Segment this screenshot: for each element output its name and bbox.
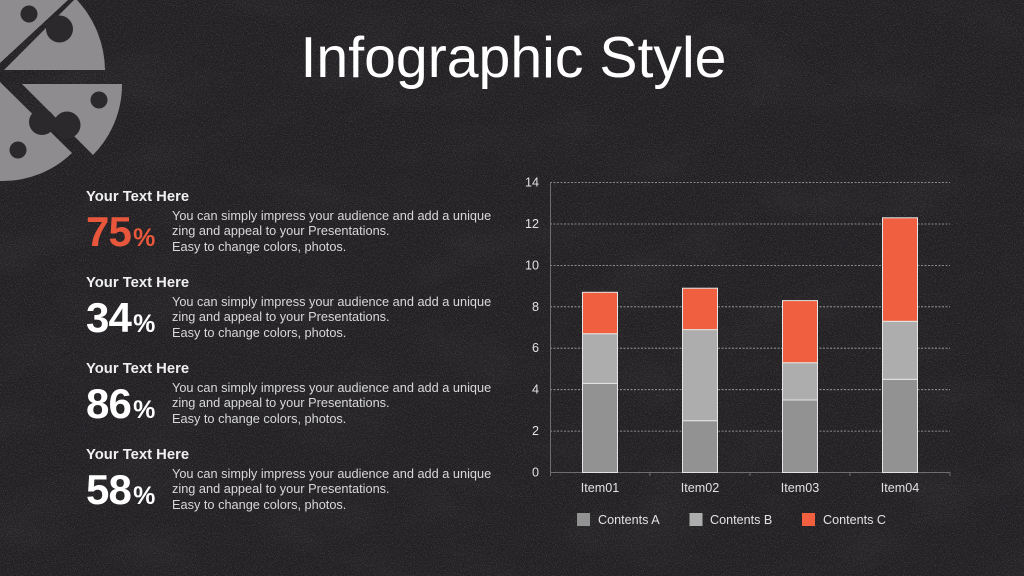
- y-axis labels: 2: [532, 424, 539, 438]
- text block: 86%: Easy to change colors, photos.: [172, 411, 346, 426]
- text block: 34%: zing and appeal to your Presentations.: [172, 309, 390, 324]
- text block: 86%: zing and appeal to your Presentations.: [172, 395, 390, 410]
- text block: 75%: Your Text Here: [86, 188, 189, 204]
- y-axis labels: 4: [532, 383, 539, 397]
- legend: [577, 513, 886, 527]
- text block: 86%: [86, 360, 491, 427]
- bar: Item01: [582, 292, 618, 472]
- x-axis labels: [581, 481, 919, 495]
- x-axis labels: Item04: [881, 481, 919, 495]
- text block: 34%: Your Text Here: [86, 274, 189, 290]
- text block: 75%: [86, 188, 491, 255]
- text block: 58%: zing and appeal to your Presentations.: [172, 481, 390, 496]
- text block: 75%: You can simply impress your audience and add a unique: [172, 208, 491, 223]
- y-axis labels: 8: [532, 300, 539, 314]
- text block: 34%: You can simply impress your audience and add a unique: [172, 294, 491, 309]
- bar: Item04: [882, 218, 918, 472]
- y-axis labels: 10: [525, 258, 539, 272]
- text block: 86%: Your Text Here: [86, 360, 189, 376]
- text block: 34%: 34%: [86, 294, 155, 341]
- x-axis labels: Item03: [781, 481, 819, 495]
- title: Infographic Style: [300, 26, 726, 90]
- bar: Item03: [782, 301, 818, 472]
- text block: 86%: You can simply impress your audience and add a unique: [172, 380, 491, 395]
- text block: 75%: zing and appeal to your Presentations.: [172, 223, 390, 238]
- y-axis labels: 6: [532, 341, 539, 355]
- text block: 58%: Easy to change colors, photos.: [172, 497, 346, 512]
- x-axis labels: Item02: [681, 481, 719, 495]
- text block: 58%: Your Text Here: [86, 446, 189, 462]
- bar: Item02: [682, 288, 718, 472]
- text block: 75%: Easy to change colors, photos.: [172, 239, 346, 254]
- y-axis labels: 14: [525, 176, 539, 190]
- text block: 58%: You can simply impress your audience and add a unique: [172, 466, 491, 481]
- y-axis labels: [525, 176, 539, 480]
- text block: 75%: 75%: [86, 208, 155, 255]
- text block: 86%: 86%: [86, 380, 155, 427]
- legend: Contents B: [710, 513, 772, 527]
- legend: Contents A: [598, 513, 660, 527]
- text block: 58%: 58%: [86, 466, 155, 513]
- text block: 34%: Easy to change colors, photos.: [172, 325, 346, 340]
- y-axis labels: 12: [525, 217, 539, 231]
- y-axis labels: 0: [532, 466, 539, 480]
- text block: 58%: [86, 446, 491, 513]
- legend: Contents C: [823, 513, 886, 527]
- icon: pizza slices: [0, 0, 122, 181]
- text block: 34%: [86, 274, 491, 341]
- x-axis labels: Item01: [581, 481, 619, 495]
